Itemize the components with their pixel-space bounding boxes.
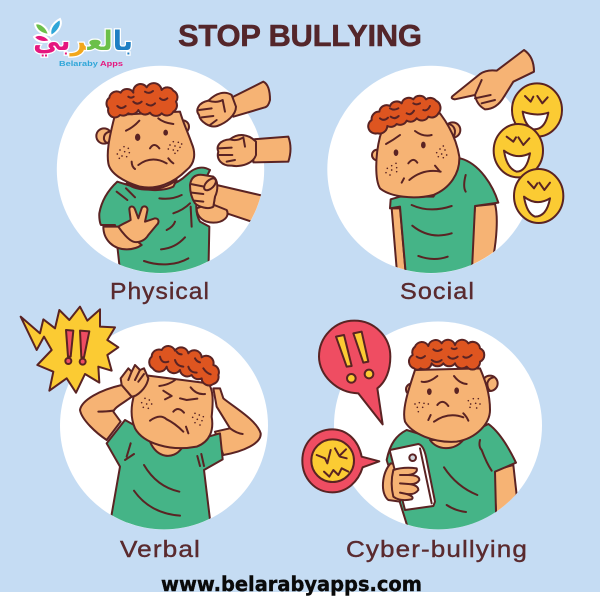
background circle: verbal [60,322,268,530]
background circle: social [327,66,535,273]
label: Cyber-bullying: Cyber-bullying [346,536,528,562]
panel: social [327,50,563,277]
background circle: physical [57,66,264,273]
logo: Belaraby Apps: Belaraby Apps [59,59,123,68]
character: verbal [21,307,261,533]
character: cyber-bullying [302,321,517,540]
background circle: cyber-bullying [334,322,542,530]
character: physical [96,82,290,277]
footer website: www.belarabyapps.com [161,572,422,596]
logo: Belaraby Apps [33,19,133,68]
character: social [368,50,563,277]
label: Verbal: Verbal [120,536,201,562]
logo: Belaraby Apps: بالعربي [33,26,133,57]
panel: verbal [21,307,268,533]
label: Social: Social [400,278,475,304]
panel: physical [57,66,290,277]
label: Physical: Physical [110,278,210,304]
panel: cyber-bullying [302,321,542,540]
title: STOP BULLYING [178,18,422,53]
